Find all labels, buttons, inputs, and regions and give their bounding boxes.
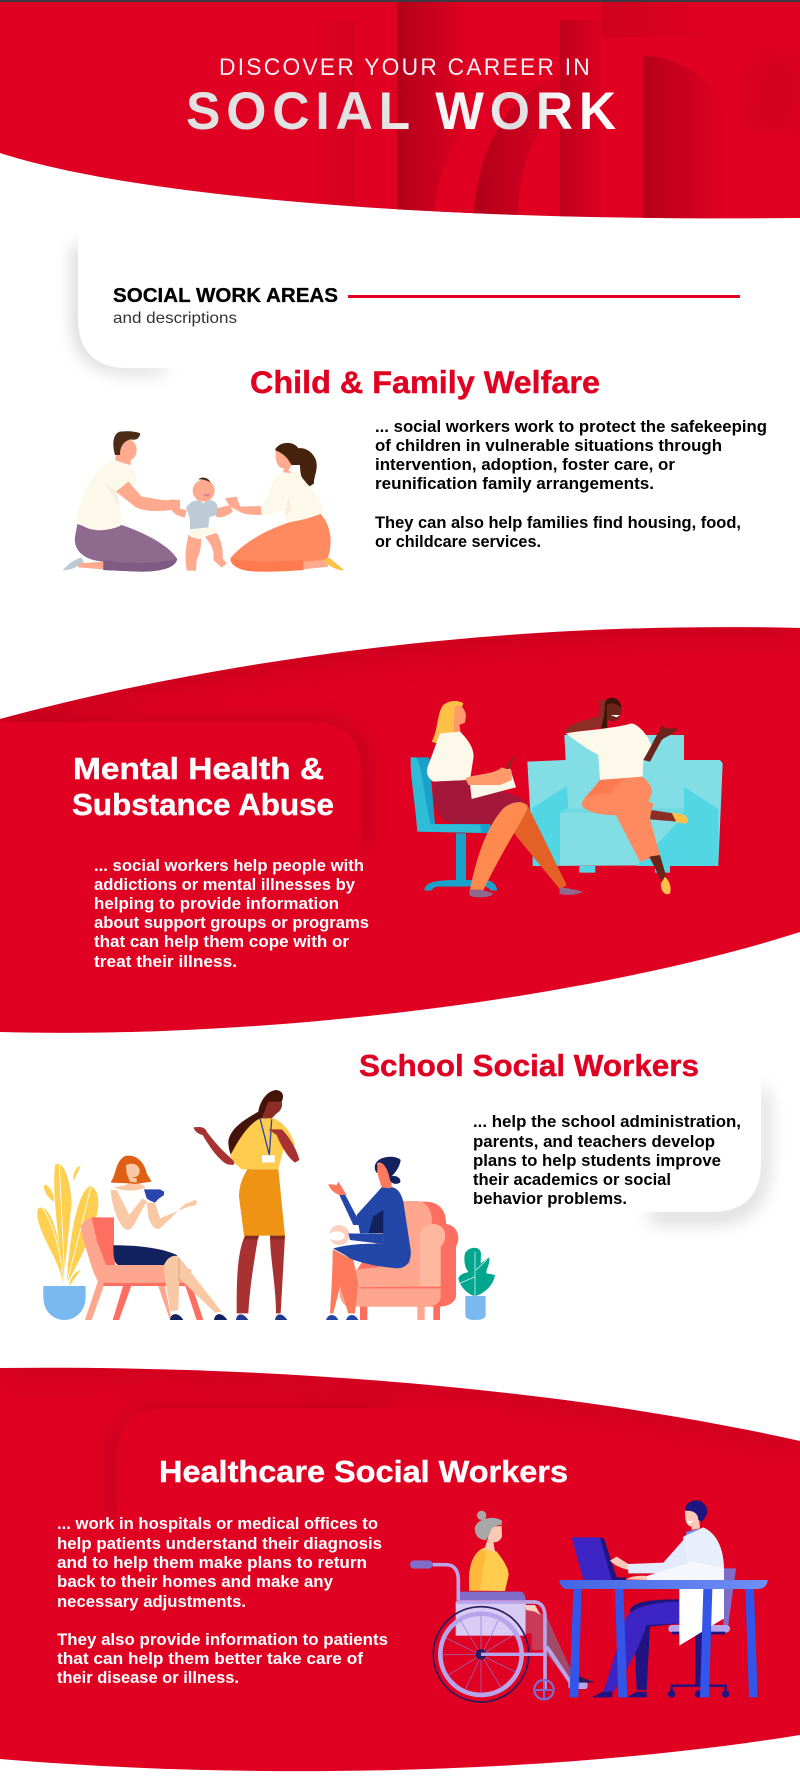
description: intervention, adoption, foster care, or	[375, 456, 676, 474]
title: SOCIAL WORK	[186, 82, 622, 141]
heading: Healthcare Social Workers	[159, 1455, 568, 1489]
description: They can also help families find housing, food,	[375, 514, 741, 532]
description: about support groups or programs	[94, 914, 369, 932]
panel: school social workers	[37, 1049, 768, 1320]
description: reunification family arrangements.	[375, 475, 654, 493]
description: parents, and teachers develop	[473, 1133, 715, 1151]
description: plans to help students improve	[473, 1152, 721, 1170]
standing woman, seated woman and small plant	[193, 1090, 495, 1320]
header decorative letter shadows	[344, 2, 797, 218]
description: ... social workers help people with	[94, 857, 364, 875]
subheading: and descriptions	[113, 310, 237, 327]
description: behavior problems.	[473, 1190, 627, 1208]
plant and seated woman in armchair	[37, 1156, 227, 1320]
heading: Mental Health &	[73, 752, 324, 786]
description	[57, 1515, 388, 1687]
illustration: three women talking	[37, 1090, 495, 1320]
description: They also provide information to patients	[57, 1631, 388, 1649]
illustration: family with baby	[62, 431, 344, 572]
description: and to help them make plans to return	[57, 1554, 367, 1572]
description: their disease or illness.	[57, 1669, 239, 1687]
band background	[0, 627, 800, 1033]
panel: healthcare social workers	[0, 1368, 800, 1771]
heading: School Social Workers	[359, 1049, 699, 1083]
description: ... help the school administration,	[473, 1113, 741, 1131]
description: helping to provide information	[94, 895, 339, 913]
header background curve	[0, 2, 800, 218]
title	[186, 54, 622, 141]
description: that can help them cope with or	[94, 933, 350, 951]
description: of children in vulnerable situations through	[375, 437, 722, 455]
description: back to their homes and make any	[57, 1573, 334, 1591]
description: that can help them better take care of	[57, 1650, 364, 1668]
heading: Substance Abuse	[72, 788, 334, 822]
panel: header banner	[0, 0, 800, 232]
illustration: patient in wheelchair and doctor at desk	[410, 1500, 768, 1702]
title: DISCOVER YOUR CAREER IN	[219, 54, 592, 81]
description: treat their illness.	[94, 953, 237, 971]
description: ... social workers work to protect the safekeeping	[375, 418, 767, 436]
description: necessary adjustments.	[57, 1593, 246, 1611]
heading	[72, 752, 334, 822]
description	[375, 418, 767, 551]
description: ... work in hospitals or medical offices to	[57, 1515, 378, 1533]
section heading: SOCIAL WORK AREAS	[113, 285, 338, 307]
description: their academics or social	[473, 1171, 671, 1189]
description: addictions or mental illnesses by	[94, 876, 356, 894]
heading: Child & Family Welfare	[250, 364, 600, 400]
description: help patients understand their diagnosis	[57, 1535, 382, 1553]
top edge line	[0, 0, 800, 2]
band background	[0, 1368, 800, 1771]
description	[473, 1113, 741, 1208]
panel: social work areas intro card	[74, 225, 740, 372]
panel: child and family welfare	[62, 364, 767, 572]
description	[94, 857, 369, 971]
panel: mental health and substance abuse	[0, 627, 800, 1033]
illustration: counselling on sofa	[411, 698, 723, 897]
description: or childcare services.	[375, 533, 541, 551]
